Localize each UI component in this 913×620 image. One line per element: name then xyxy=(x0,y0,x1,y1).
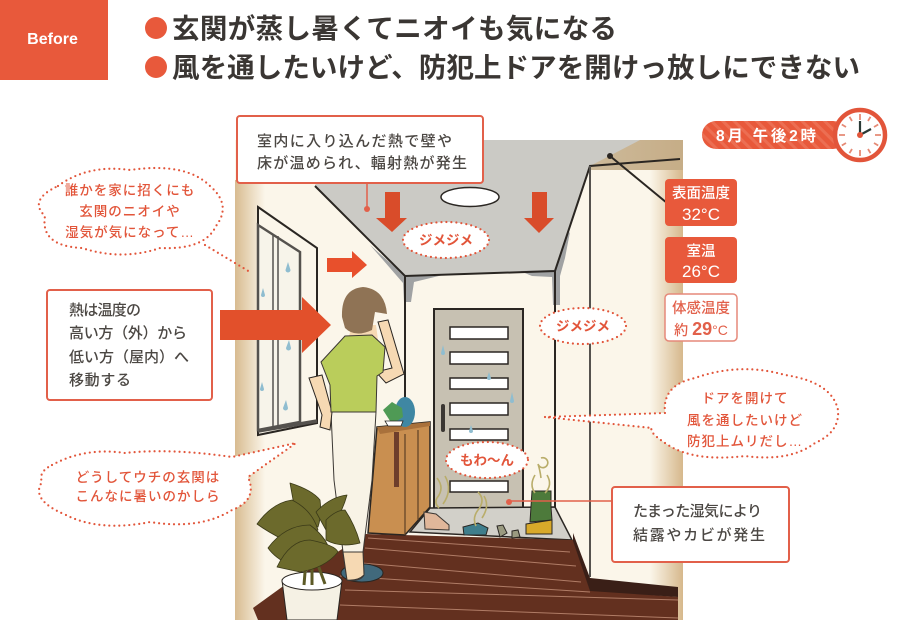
room outlines xyxy=(315,159,680,577)
time label: 8月 午後2時 xyxy=(716,126,816,145)
callout: heat moves from high to low: 低い方（屋内）へ xyxy=(69,349,189,366)
entrance floor xyxy=(410,507,572,540)
before tag xyxy=(0,0,108,80)
large plant xyxy=(257,483,360,585)
shirt xyxy=(321,335,385,412)
shoes xyxy=(424,491,552,538)
callout: condensation and mold xyxy=(506,487,789,562)
small plant on cabinet xyxy=(383,397,415,427)
legs xyxy=(331,412,376,580)
speech cloud: why so hot: こんなに暑いのかしら xyxy=(76,489,220,504)
speech cloud: smell when inviting guests: 誰かを家に招くにも xyxy=(65,182,195,198)
icon: clock xyxy=(835,110,885,160)
before tag: Before xyxy=(27,31,78,48)
speech cloud: want ventilation but unsafe: ドアを開けて xyxy=(702,391,788,406)
label: stuffy air xyxy=(446,442,528,478)
callout: radiant heat xyxy=(237,116,483,212)
temperature: room: 室温 xyxy=(686,243,716,260)
mold stains xyxy=(370,232,570,305)
illustration: entrance hall xyxy=(235,140,683,620)
label: humid on ceiling xyxy=(403,222,489,258)
label: stuffy air: もわ～ん xyxy=(460,453,514,468)
temperature: room xyxy=(665,237,737,283)
title xyxy=(145,13,860,83)
speech cloud: want ventilation but unsafe xyxy=(545,369,838,458)
title: 風を通したいけど、防犯上ドアを開けっ放しにできない xyxy=(172,52,860,83)
label: humid on ceiling: ジメジメ xyxy=(419,233,473,248)
floor mat xyxy=(341,564,383,582)
right arm xyxy=(376,320,404,383)
title: 玄関が蒸し暑くてニオイも気になる xyxy=(172,13,617,44)
door xyxy=(434,309,523,510)
leader line to temperature labels xyxy=(607,153,667,203)
callout: radiant heat: 床が温められ、輻射熱が発生 xyxy=(257,154,467,172)
odor steam xyxy=(436,458,550,526)
callout: radiant heat: 室内に入り込んだ熱で壁や xyxy=(257,133,452,150)
speech cloud: smell when inviting guests: 玄関のニオイや xyxy=(79,204,181,219)
temperature: surface: 32°C xyxy=(682,205,720,224)
speech cloud: why so hot: どうしてウチの玄関は xyxy=(76,470,220,485)
left arm xyxy=(309,375,332,430)
temperature: perceived: 約 29°C xyxy=(674,319,728,339)
ceiling xyxy=(315,140,640,276)
temperature: surface xyxy=(665,179,737,226)
shoe cabinet xyxy=(368,422,430,535)
feet xyxy=(343,552,364,580)
speech cloud: why so hot xyxy=(39,443,296,526)
temperature: perceived xyxy=(665,294,737,341)
woman xyxy=(309,287,404,580)
time label xyxy=(702,121,847,149)
temperature: surface: 表面温度 xyxy=(672,184,730,202)
temperature: room: 26°C xyxy=(682,262,720,281)
arrow: heat from ceiling right xyxy=(524,192,554,233)
callout: heat moves from high to low: 移動する xyxy=(69,372,131,389)
callout: heat moves from high to low xyxy=(47,290,212,400)
callout: condensation and mold: たまった湿気により xyxy=(633,503,762,520)
label: humid on wall: ジメジメ xyxy=(556,319,610,334)
speech cloud: smell when inviting guests: 湿気が気になって… xyxy=(65,224,195,240)
arrow: heat entering through window xyxy=(220,297,331,353)
callout: heat moves from high to low: 熱は温度の xyxy=(69,302,141,319)
speech cloud: want ventilation but unsafe: 風を通したいけど xyxy=(687,413,803,428)
callout: heat moves from high to low: 高い方（外）から xyxy=(69,325,187,342)
temperature: perceived: 体感温度 xyxy=(672,299,730,317)
plant pot xyxy=(282,572,342,620)
callout: condensation and mold: 結露やカビが発生 xyxy=(633,526,765,544)
ceiling light xyxy=(441,188,499,206)
speech cloud: want ventilation but unsafe: 防犯上ムリだし… xyxy=(687,434,803,449)
room walls xyxy=(235,140,683,620)
speech cloud: smell when inviting guests xyxy=(39,168,250,272)
wooden floor xyxy=(253,533,678,620)
window xyxy=(258,207,317,435)
label: humid on wall xyxy=(540,308,626,344)
hair xyxy=(342,287,387,334)
arrow: heat to wall xyxy=(327,251,367,278)
arrow: heat from ceiling left xyxy=(376,192,407,232)
neck xyxy=(348,325,378,340)
